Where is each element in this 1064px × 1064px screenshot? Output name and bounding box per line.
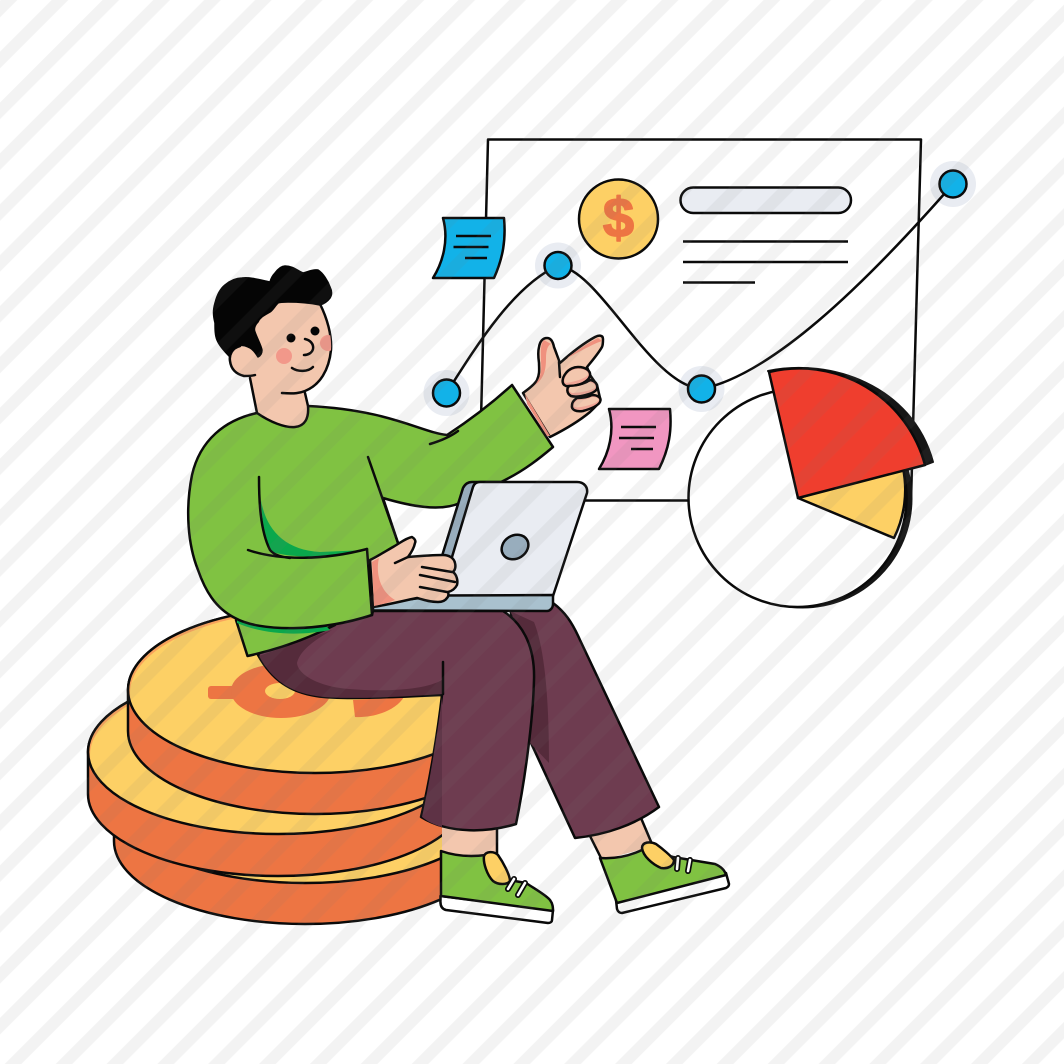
coin emblem: dollar sign — [208, 664, 404, 718]
icon: dollar coin — [579, 180, 658, 258]
neck and jaw outline — [250, 304, 331, 427]
icon: dollar coin: $ — [603, 186, 634, 249]
coin: top — [126, 615, 440, 816]
green sweater — [188, 385, 553, 628]
shoe sole — [616, 873, 729, 913]
line chart — [424, 161, 976, 416]
trouser shading — [259, 630, 442, 698]
left shoe and ankle — [440, 825, 553, 923]
shirt hem — [236, 620, 335, 656]
hand shading — [372, 558, 395, 606]
front trouser leg — [258, 611, 534, 830]
panel: report board — [479, 140, 921, 500]
cheek: right — [320, 335, 332, 351]
shoe sole — [440, 896, 553, 923]
head and neck — [214, 266, 336, 427]
hand shading — [525, 338, 602, 436]
laptop lid — [430, 482, 587, 598]
shoe tongue — [484, 852, 510, 884]
coin: middle — [86, 700, 442, 878]
shoe laces — [677, 858, 690, 871]
nose — [304, 339, 313, 355]
laptop logo — [497, 530, 533, 564]
back trouser leg — [510, 603, 659, 838]
fingers — [563, 367, 601, 411]
laptop lid edge — [442, 482, 500, 600]
skin fill — [245, 302, 331, 427]
coin: bottom — [114, 717, 496, 924]
sweater fold lines — [248, 431, 458, 558]
coin stack — [86, 615, 442, 926]
sweater shadow — [261, 500, 367, 556]
mouth — [292, 367, 313, 371]
pointing hand — [523, 336, 603, 437]
pie slice: yellow — [798, 468, 905, 538]
shoe upper — [600, 849, 726, 903]
text placeholder: title pill — [680, 188, 851, 213]
pie slice: red — [768, 368, 933, 498]
laptop — [373, 482, 587, 611]
shoe upper — [441, 851, 553, 911]
shoe tongue — [642, 842, 674, 868]
pie chart — [688, 368, 933, 608]
sticky note: pink — [599, 409, 671, 469]
sticky note: blue — [433, 218, 505, 278]
cuff — [367, 549, 372, 615]
hand on laptop — [367, 537, 457, 615]
laptop base — [373, 595, 553, 611]
ear — [230, 346, 262, 376]
eyes — [286, 326, 320, 342]
right shoe and ankle — [590, 818, 729, 913]
cheek: left — [276, 348, 292, 364]
finger lines — [395, 557, 455, 592]
text placeholder: lines — [683, 242, 848, 282]
shoe laces — [508, 879, 525, 895]
hair — [214, 266, 332, 357]
